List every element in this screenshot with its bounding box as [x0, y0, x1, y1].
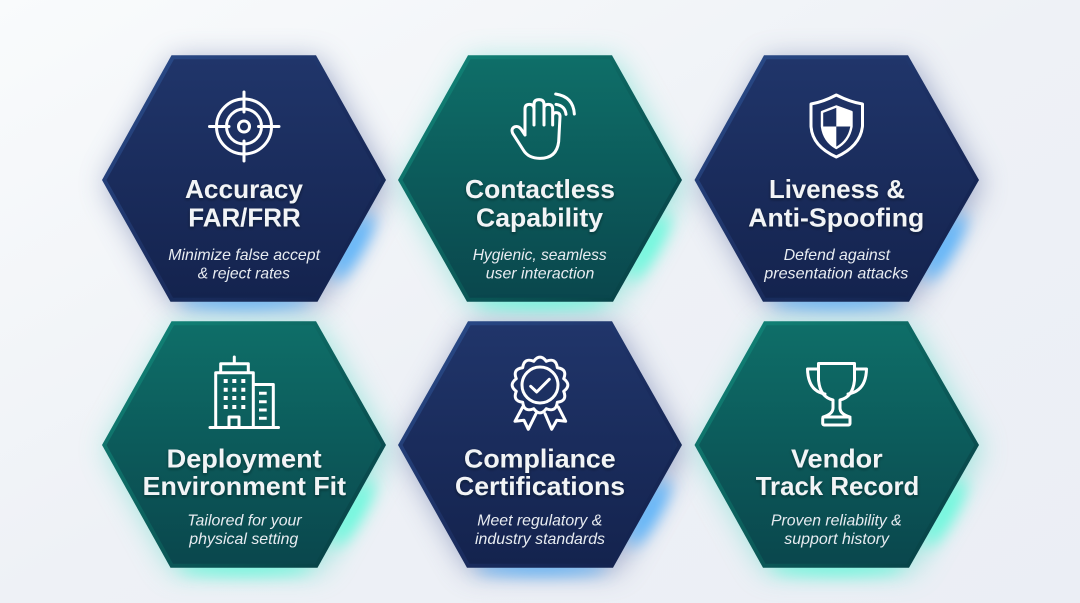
heading: Deployment Environment Fit: Deployment — [167, 443, 322, 473]
panel: Liveness and Anti-Spoofing — [694, 55, 982, 308]
text: accuracy description — [168, 247, 321, 282]
panel: Contactless Capability — [398, 55, 685, 308]
icon: shield — [811, 95, 862, 157]
heading: Vendor Track Record: Track Record — [756, 471, 919, 501]
heading: Liveness and Anti-Spoofing — [748, 174, 924, 232]
panel: Deployment Environment Fit — [102, 321, 389, 574]
text: vendor description: Proven reliability & — [771, 513, 902, 530]
panel: Vendor Track Record — [694, 321, 982, 574]
icon: trophy — [808, 364, 866, 425]
panel: Compliance Certifications — [398, 321, 685, 574]
text: deployment description: Tailored for your — [187, 513, 302, 530]
text: liveness description: Defend against — [784, 247, 891, 264]
text: compliance description: Meet regulatory & — [477, 513, 602, 530]
icon: office buildings — [210, 357, 278, 428]
text: contactless description — [473, 247, 607, 282]
heading: Compliance Certifications: Compliance — [464, 443, 616, 473]
heading: Accuracy FAR/FRR — [185, 174, 304, 232]
heading: Compliance Certifications — [455, 443, 625, 501]
text: accuracy description: & reject rates — [198, 265, 290, 282]
text: liveness description: presentation attacks — [763, 265, 908, 282]
heading: Accuracy FAR/FRR: Accuracy — [185, 174, 304, 204]
text: accuracy description: Minimize false accept — [168, 247, 321, 264]
text: vendor description — [771, 513, 902, 548]
icon: waving hand — [512, 94, 574, 158]
heading: Contactless Capability — [465, 174, 615, 232]
text: deployment description: physical setting — [188, 531, 298, 548]
text: compliance description: industry standards — [475, 531, 605, 548]
text: compliance description — [475, 513, 605, 548]
text: deployment description — [187, 513, 302, 548]
text: vendor description: support history — [784, 531, 890, 548]
heading: Liveness and Anti-Spoofing: Liveness & — [769, 174, 905, 204]
icon: certification rosette — [512, 357, 568, 429]
text: contactless description: Hygienic, seamless — [473, 247, 607, 264]
heading: Contactless Capability: Contactless — [465, 174, 615, 204]
heading: Vendor Track Record: Vendor — [791, 443, 883, 473]
text: liveness description — [763, 247, 908, 282]
heading: Deployment Environment Fit: Environment Fit — [143, 471, 346, 501]
panel: Accuracy FAR/FRR — [102, 55, 389, 308]
heading: Vendor Track Record — [756, 443, 919, 501]
heading: Liveness and Anti-Spoofing: Anti-Spoofing — [748, 202, 924, 232]
heading: Accuracy FAR/FRR: FAR/FRR — [188, 202, 301, 232]
text: contactless description: user interaction — [486, 265, 594, 282]
icon: target crosshair — [210, 92, 279, 161]
heading: Compliance Certifications: Certifications — [455, 471, 625, 501]
heading: Deployment Environment Fit — [143, 443, 346, 501]
heading: Contactless Capability: Capability — [476, 202, 604, 232]
